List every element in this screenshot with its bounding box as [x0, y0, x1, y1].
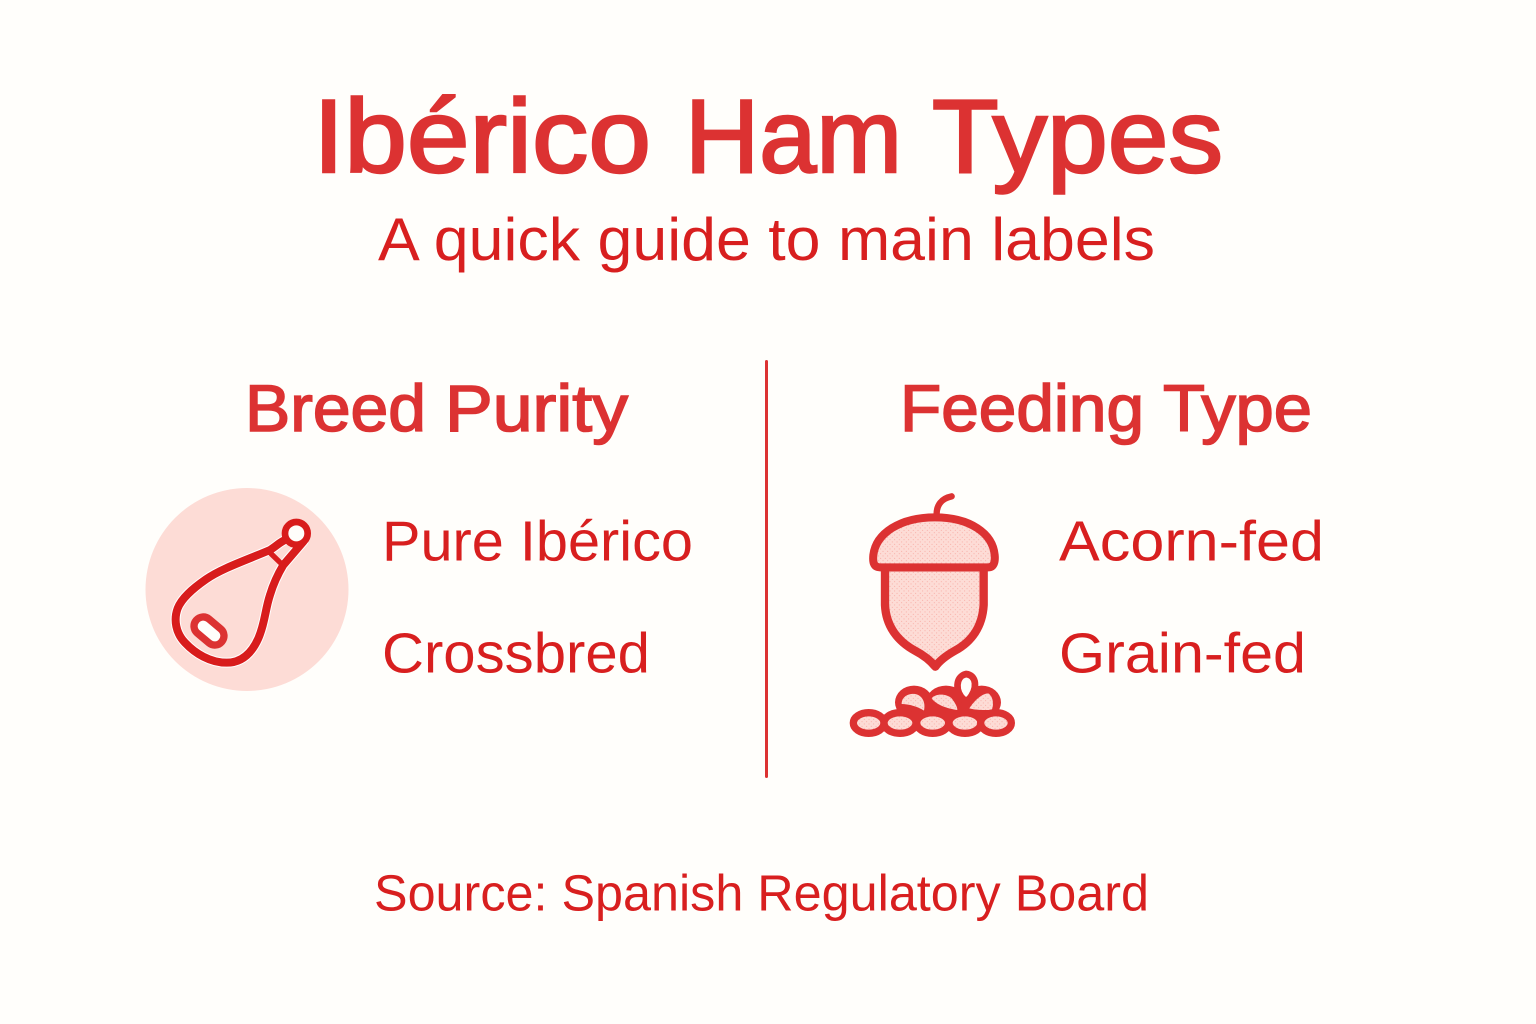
label: crossbred: Crossbred	[382, 622, 650, 686]
label: pure iberico: Pure Ibérico	[382, 510, 693, 574]
heading: breed purity	[245, 371, 628, 445]
heading: feeding type: Type	[1163, 371, 1312, 445]
divider	[765, 360, 768, 778]
panel: feeding type	[853, 371, 1324, 733]
label: grain-fed: Grain-fed	[1059, 622, 1306, 686]
icon: acorn with pile of nuts	[853, 496, 1011, 733]
label: acorn-fed: Acorn-fed	[1059, 510, 1324, 574]
heading: feeding type: Feeding	[900, 371, 1144, 445]
title: Ibérico	[313, 79, 651, 195]
panel: breed purity	[146, 371, 693, 691]
title: Ham	[685, 79, 902, 195]
title	[313, 79, 1223, 195]
heading: feeding type	[900, 371, 1312, 445]
heading: breed purity: Purity	[445, 371, 628, 445]
icon: ham	[146, 488, 348, 691]
heading: breed purity: Breed	[245, 371, 426, 445]
title: Types	[932, 79, 1223, 195]
source note: Source: Spanish Regulatory Board	[374, 864, 1149, 922]
subtitle: A quick guide to main labels	[378, 206, 1155, 273]
